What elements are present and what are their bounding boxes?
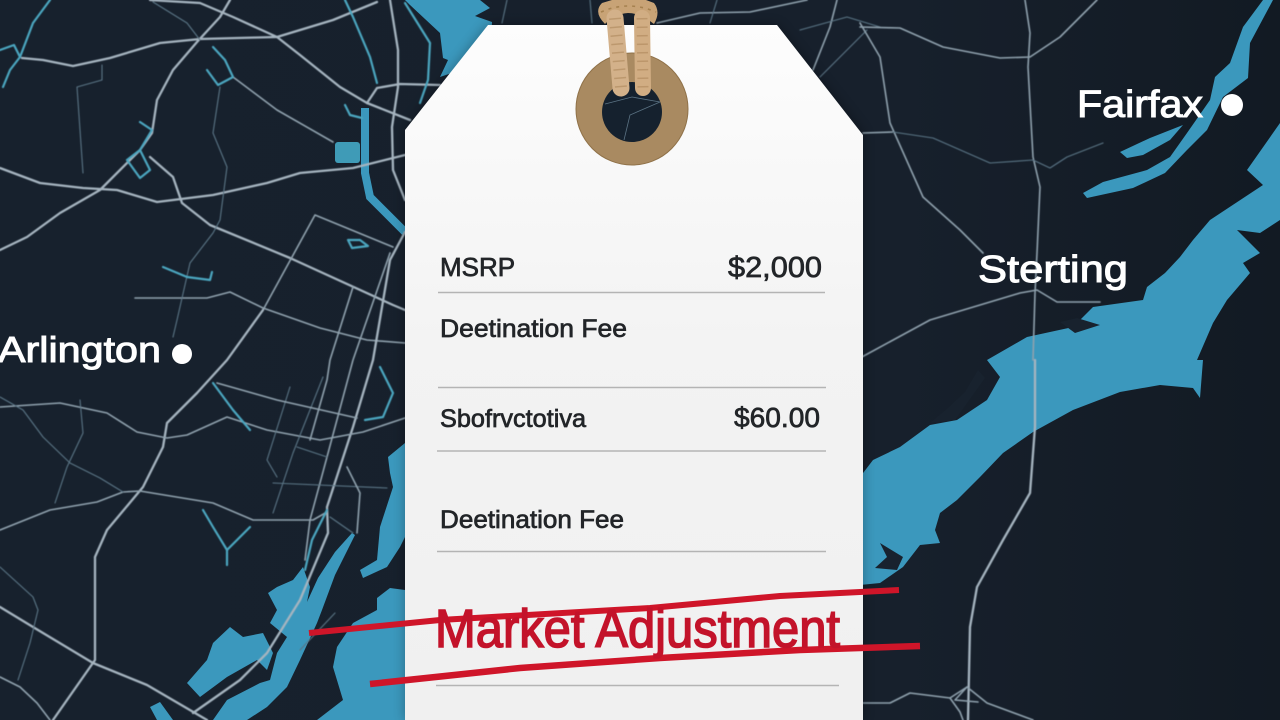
city label: Sterting: Sterting (978, 249, 1128, 291)
water: lower left channel (360, 443, 405, 578)
city label: Fairfax: Fairfax (1077, 84, 1203, 126)
row: garbled line item: $60.00 (734, 402, 820, 433)
water: top inlet behind the tag (405, 0, 492, 77)
water: pond (335, 142, 360, 163)
roads: teal tributaries (0, 0, 430, 570)
roads: top centre and right side (502, 0, 1103, 720)
row: MSRP (440, 252, 822, 284)
water: left river (365, 108, 405, 232)
water: lower left bay (317, 588, 405, 720)
water: lower left marsh (187, 627, 273, 697)
row: second destination fee: Deetination Fee (440, 506, 624, 534)
red strike lines (309, 590, 920, 684)
price tag (405, 0, 863, 720)
city label: Fairfax (1077, 84, 1243, 126)
roads: left side (0, 0, 440, 720)
row: garbled line item: Sbofrvctotiva (440, 405, 586, 433)
water: islands in the bay (875, 318, 1100, 570)
row: garbled line item (440, 402, 820, 433)
row: MSRP: MSRP (440, 252, 515, 282)
tag body (405, 25, 863, 720)
water: small inlet at the bottom (150, 702, 173, 720)
row: destination fee: Deetination Fee (440, 315, 627, 343)
market adjustment text: Market Adjustment (435, 599, 840, 659)
city label: Arlington: Arlington (0, 329, 161, 370)
rope (598, 0, 658, 88)
eyelet (576, 53, 688, 165)
water: upper right river (1083, 0, 1273, 198)
water: large bay on the right (860, 123, 1280, 585)
water: river branch (1120, 125, 1183, 158)
water: lower left estuary (213, 533, 355, 720)
row: MSRP: $2,000 (728, 252, 822, 284)
tag shadow (405, 25, 863, 720)
